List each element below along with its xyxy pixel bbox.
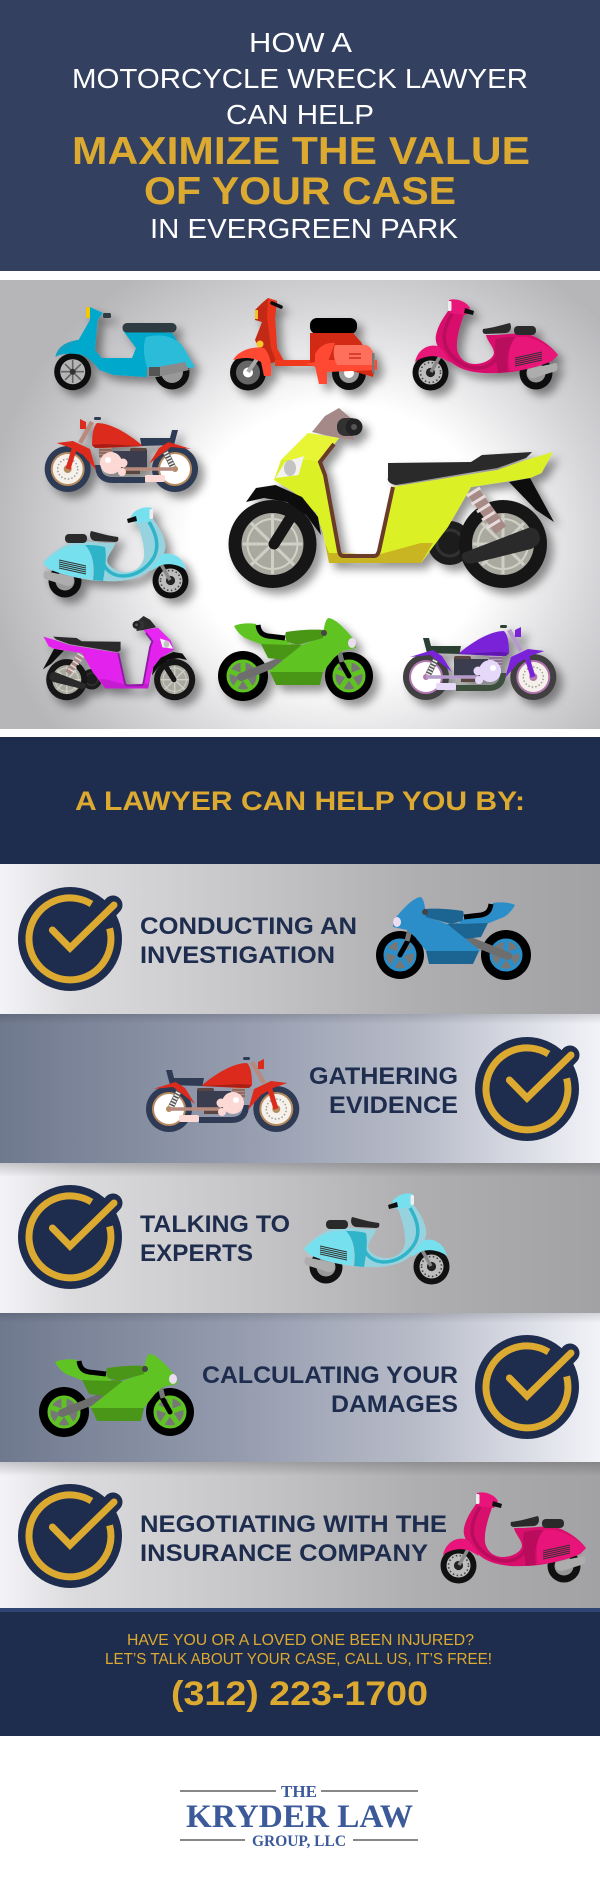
text: calculating your damages: DAMAGES [331, 1391, 458, 1418]
icon: purple cafe racer [403, 625, 556, 700]
logo: the kryder law group [180, 1782, 418, 1850]
icon: light blue scooter [43, 507, 188, 598]
title line: motorcycle wreck lawyer: MOTORCYCLE WRECK LAWYER [72, 63, 528, 94]
text: injured question: HAVE YOU OR A LOVED ONE BEEN INJURED? [127, 1632, 474, 1649]
highlighted heading line 2: OF YOUR CASE [144, 170, 456, 213]
text: talking to experts [140, 1211, 290, 1267]
icon: check badge [18, 887, 122, 991]
text: calculating your damages: CALCULATING YOUR [202, 1362, 458, 1389]
text: call us: LET’S TALK ABOUT YOUR CASE, CALL US, IT’S FREE! [105, 1651, 492, 1668]
title line: how a: HOW A [249, 27, 352, 58]
heading: A LAWYER CAN HELP YOU BY: [75, 786, 525, 816]
text: gathering evidence: GATHERING [309, 1063, 458, 1090]
text: gathering evidence [309, 1063, 458, 1119]
text: talking to experts: EXPERTS [140, 1240, 253, 1267]
panel: calculating your damages [0, 1313, 600, 1462]
highlighted heading line 1: MAXIMIZE THE VALUE [72, 130, 530, 173]
panel: call to action footer [0, 1608, 600, 1736]
title line: can help: CAN HELP [226, 99, 374, 130]
icon: red scooter [230, 298, 377, 390]
icon: cyan scooter [54, 307, 195, 390]
panel: talking to experts [0, 1163, 600, 1313]
phone number: (312) 223-1700 [171, 1675, 428, 1713]
text: negotiating with the insurance company: INSURANCE COMPANY [140, 1540, 428, 1567]
text: calculating your damages [202, 1362, 458, 1418]
icon: green sport bike [218, 618, 373, 701]
icon: green sport bike [39, 1354, 194, 1437]
icon: pink scooter [440, 1492, 586, 1584]
logo: the kryder law group: THE [281, 1782, 317, 1801]
text: negotiating with the insurance company [140, 1511, 447, 1567]
title line: location: IN EVERGREEN PARK [150, 213, 458, 244]
header panel with title [0, 0, 600, 271]
text: gathering evidence: EVIDENCE [329, 1092, 458, 1119]
panel: gathering evidence [0, 1014, 600, 1163]
icon: red cafe racer [146, 1057, 299, 1132]
icon: large yellow scooter [228, 408, 554, 588]
icon: magenta scooter [43, 616, 195, 700]
text: conducting an investigation: CONDUCTING AN [140, 913, 357, 940]
icon: blue sport bike [376, 897, 531, 980]
icon: pink scooter [412, 299, 558, 390]
panel: conducting an investigation [0, 864, 600, 1014]
logo: the kryder law group: GROUP, LLC [252, 1833, 346, 1850]
icon: check badge [18, 1185, 122, 1289]
icon: check badge [475, 1037, 579, 1141]
icon: check badge [475, 1335, 579, 1439]
panel: a lawyer can help you by [0, 737, 600, 864]
panel: motorcycle collection [0, 280, 600, 729]
icon: red cafe racer [45, 417, 198, 492]
icon: check badge [18, 1484, 122, 1588]
text: conducting an investigation: INVESTIGATION [140, 942, 335, 969]
icon: light blue scooter [304, 1193, 450, 1284]
panel: negotiating with the insurance company [0, 1462, 600, 1608]
text: talking to experts: TALKING TO [140, 1211, 290, 1238]
text: conducting an investigation [140, 913, 357, 969]
logo: the kryder law group: KRYDER LAW [186, 1799, 413, 1835]
text: negotiating with the insurance company: NEGOTIATING WITH THE [140, 1511, 447, 1538]
